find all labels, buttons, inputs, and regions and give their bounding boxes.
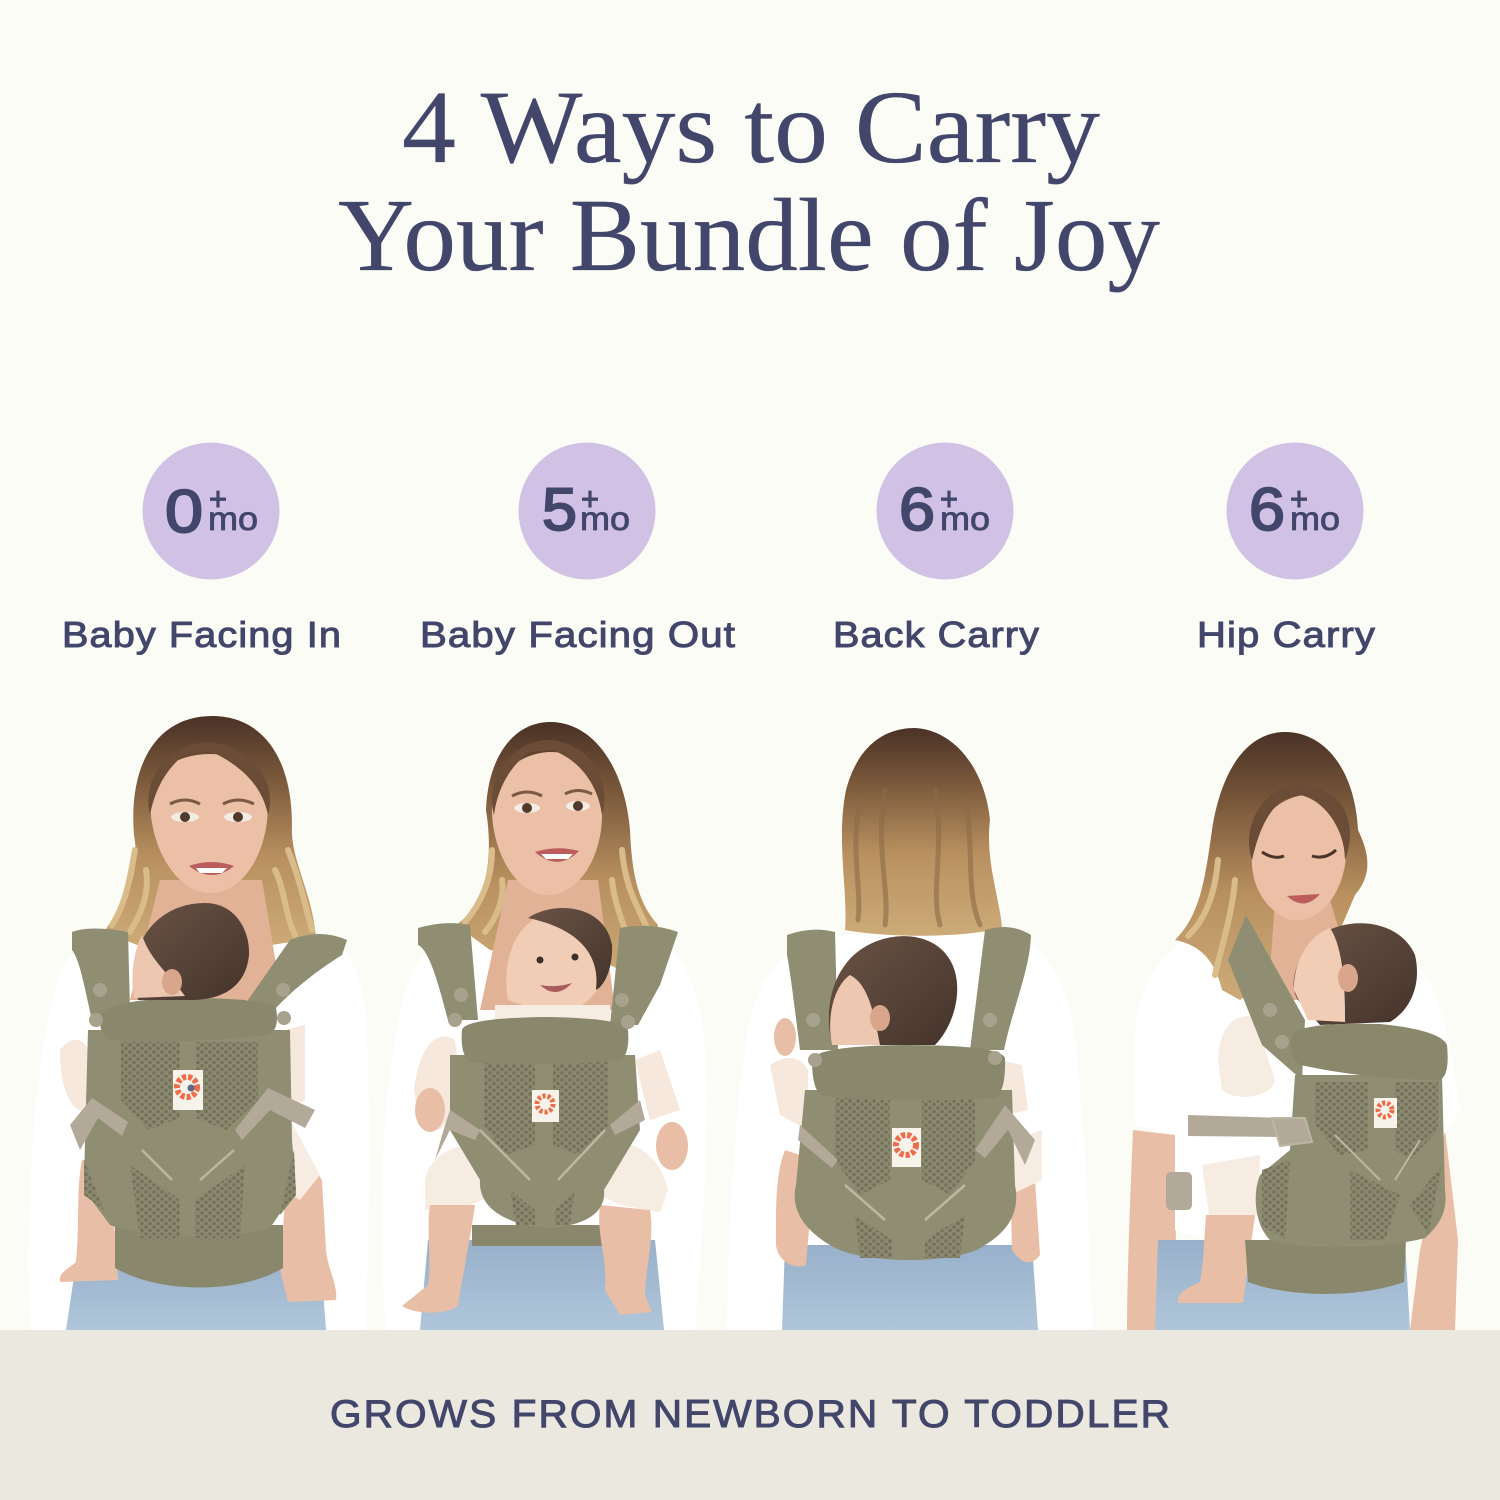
label: Baby Facing In: Baby Facing In xyxy=(62,614,342,655)
age badge: 6+ months xyxy=(876,442,1014,580)
age badge: 0+ months: mo xyxy=(208,500,258,537)
age badge: 0+ months xyxy=(142,442,280,580)
photo: mother with baby on back xyxy=(727,728,1092,1330)
age badge: 6+ months: mo xyxy=(1290,500,1340,537)
photo: mother with baby facing in xyxy=(29,716,369,1330)
age badge: 5+ months xyxy=(518,442,656,580)
age badge: 5+ months: 5 xyxy=(542,476,577,543)
label: Baby Facing Out: Baby Facing Out xyxy=(420,614,736,655)
label: Back Carry: Back Carry xyxy=(833,614,1040,655)
age badge: 0+ months: + xyxy=(209,481,227,517)
age badge: 6+ months: 6 xyxy=(1249,476,1285,543)
carry option: baby facing out, age badge and label xyxy=(420,442,736,655)
photo: mother with baby on hip xyxy=(1127,732,1460,1330)
title: 4 Ways to Carry xyxy=(402,70,1100,185)
footer band xyxy=(0,1330,1500,1500)
title: Your Bundle of Joy xyxy=(338,178,1160,293)
age badge: 6+ months: 6 xyxy=(899,476,935,543)
title xyxy=(338,70,1160,293)
carry option: hip carry, age badge and label xyxy=(1197,442,1376,655)
age badge: 6+ months: + xyxy=(1290,481,1308,517)
age badge: 6+ months xyxy=(1226,442,1364,580)
label: Hip Carry: Hip Carry xyxy=(1197,614,1376,655)
carry option: back carry, age badge and label xyxy=(833,442,1040,655)
carry option: baby facing in, age badge and label xyxy=(62,442,342,655)
footer caption: GROWS FROM NEWBORN TO TODDLER xyxy=(330,1393,1172,1436)
age badge: 5+ months: + xyxy=(581,481,599,517)
age badge: 6+ months: + xyxy=(940,481,958,517)
age badge: 5+ months: mo xyxy=(580,500,630,537)
photo: mother with baby facing out xyxy=(381,722,707,1330)
age badge: 0+ months: 0 xyxy=(165,478,203,545)
age badge: 6+ months: mo xyxy=(940,500,990,537)
